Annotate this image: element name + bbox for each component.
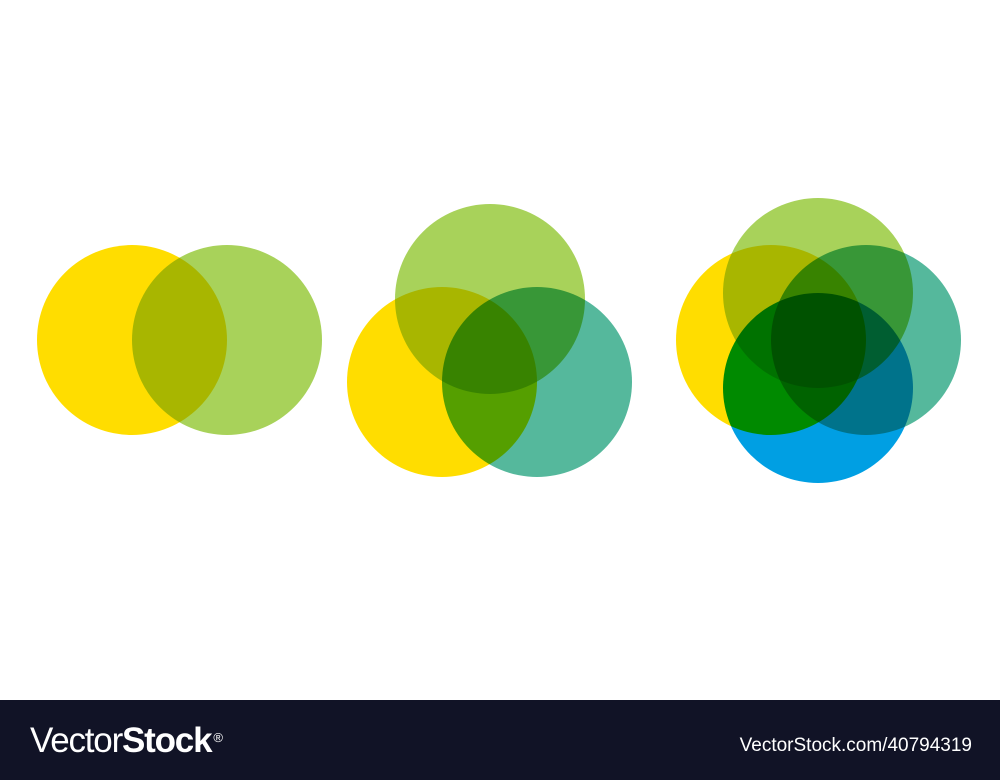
url text: VectorStock.com/40794319 bbox=[740, 735, 972, 756]
venn: two circles bbox=[37, 245, 322, 435]
logo: VectorStock® bbox=[30, 721, 222, 760]
venn: three circles bbox=[347, 204, 632, 477]
venn: four circles bbox=[676, 198, 961, 483]
footer bar bbox=[0, 700, 1000, 780]
